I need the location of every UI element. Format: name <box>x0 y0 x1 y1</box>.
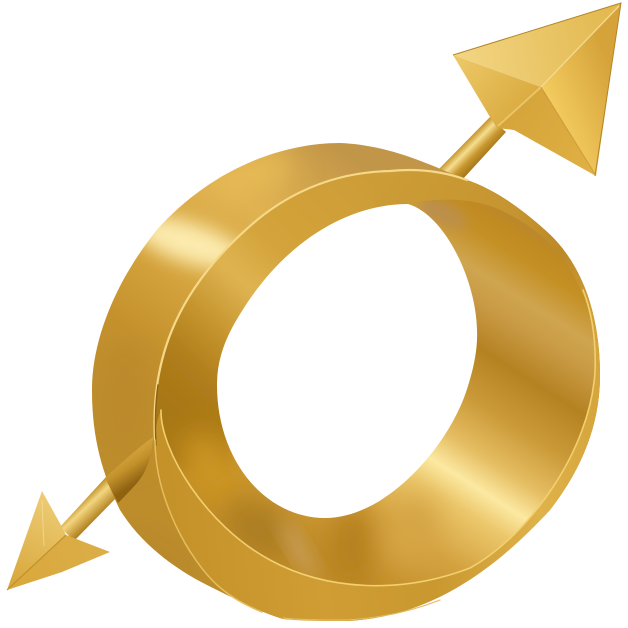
lower arrowhead <box>7 491 110 590</box>
lower shaft section against ring <box>105 437 153 503</box>
lower arrow shaft <box>60 477 119 541</box>
upper arrow <box>436 3 621 180</box>
ring back band <box>80 130 620 628</box>
ring <box>80 130 620 628</box>
ring edge highlights <box>154 170 595 620</box>
top-left band shading <box>156 173 422 469</box>
bottom-left inner shading <box>174 428 244 494</box>
lower arrow <box>7 477 119 590</box>
ring bottom band <box>155 372 600 621</box>
inner shading, right top <box>417 200 470 230</box>
ring rim, upper right <box>375 170 600 378</box>
upper arrowhead <box>453 3 621 176</box>
ring hole <box>217 204 477 518</box>
ring front face <box>156 173 600 621</box>
upper arrow shaft <box>436 117 506 180</box>
